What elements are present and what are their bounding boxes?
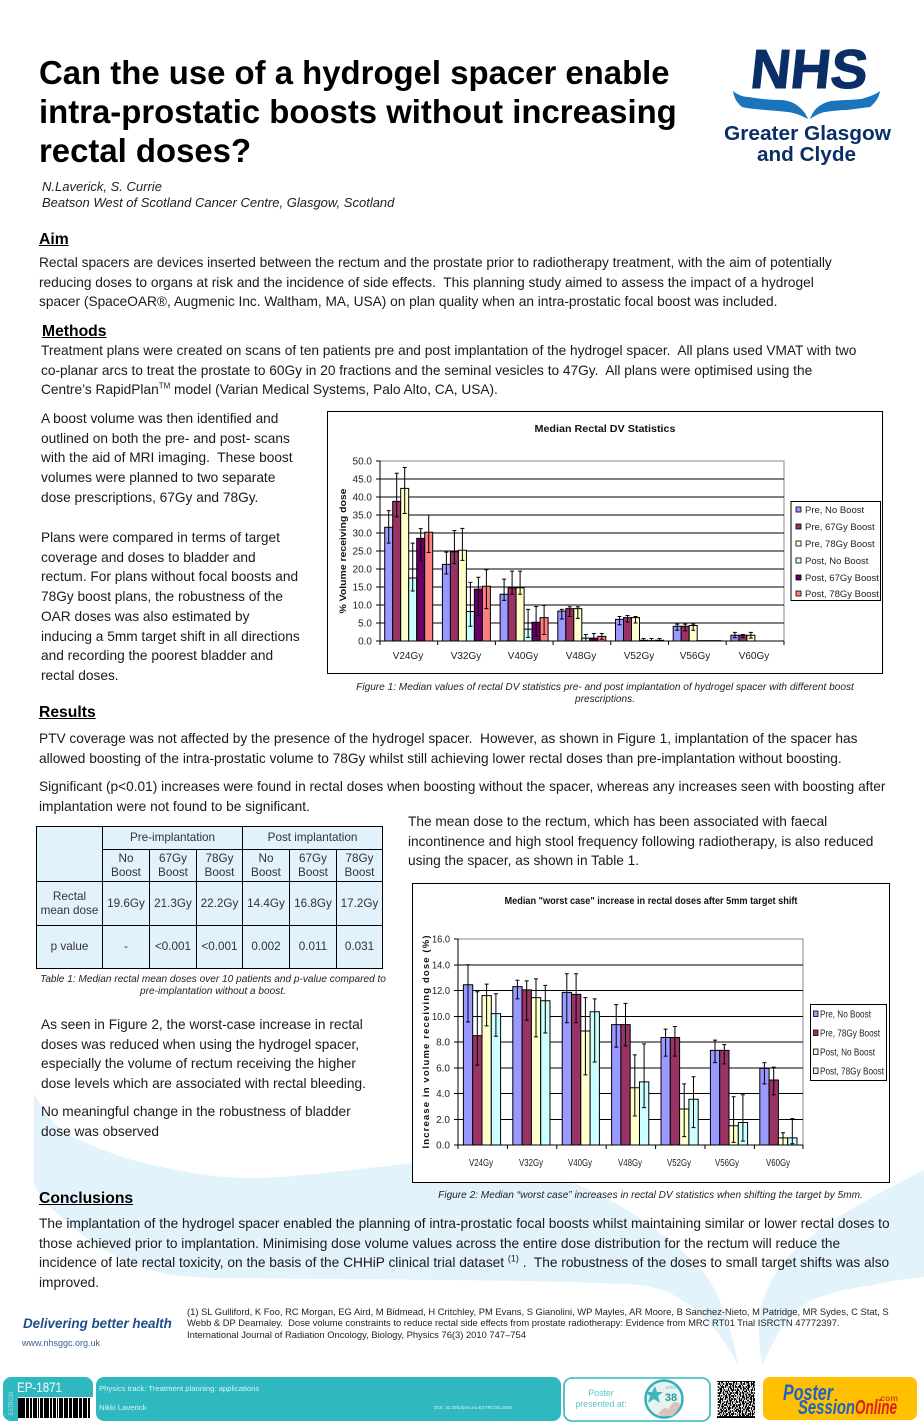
table 1: 17.2Gy (341, 896, 378, 910)
chart: figure 1: 5.0 (358, 618, 372, 630)
chart: figure 1: Post, 78Gy Boost (805, 589, 879, 600)
text: mean dose: The mean dose to the rectum, which has been associated with faecal (408, 814, 827, 829)
text: aim (39, 255, 832, 309)
authors: Beatson West of Scotland Cancer Centre, Glasgow, Scotland (42, 195, 394, 210)
text: bladder: dose was observed (41, 1124, 159, 1139)
footer: track and author bar: Physics track: Treatment planning: applications (99, 1384, 259, 1393)
chart: figure 2: 10.0 (432, 1012, 450, 1023)
chart: figure 2: Post, 78Gy Boost (820, 1066, 884, 1078)
table 1: 22.2Gy (201, 896, 238, 910)
heading: conclusions: Conclusions (39, 1190, 133, 1207)
chart: figure 2: Median "worst case" increase in rectal doses after 5mm target shift (504, 895, 798, 907)
text: mean dose: using the spacer, as shown in Table 1. (408, 853, 639, 868)
NHS logo (724, 38, 891, 166)
footer: track and author bar: Nikki Laverick (99, 1403, 146, 1412)
text: boost volume: dose prescriptions, 67Gy and 78Gy. (41, 490, 258, 505)
chart: figure 2: Increase in volume receiving dose (%) (421, 935, 432, 1149)
chart: figure 1: V56Gy (680, 651, 710, 662)
caption: figure 1: prescriptions. (575, 694, 635, 705)
text: boost volume: with the aid of MRI imaging. These boost (41, 450, 293, 465)
references: International Journal of Radiation Oncology, Biology, Physics 76(3) 2010 747–754 (187, 1329, 526, 1340)
text: conclusions: improved. (39, 1275, 99, 1290)
text: plan comparison: rectum. For plans without focal boosts and (41, 569, 298, 584)
table 1: Boost (345, 866, 374, 878)
text: worst case: especially the volume of rectum receiving the higher (41, 1056, 356, 1071)
table 1: Boost (298, 866, 328, 878)
table 1: <0.001 (155, 940, 191, 953)
caption: table 1: Table 1: Median rectal mean doses over 10 patients and p-value compared to (40, 974, 386, 985)
heading: aim: Aim (39, 231, 69, 248)
caption: table 1: pre-implantation without a boost. (140, 986, 286, 997)
text: plan comparison (41, 530, 300, 683)
text: plan comparison: 78Gy boost plans, the robustness of the (41, 589, 283, 604)
chart: figure 1: Pre, No Boost (805, 505, 864, 516)
footer: PosterSessionOnline logo: Online (855, 1397, 897, 1419)
text: boost volume: volumes were planned to two separate (41, 470, 275, 485)
heading: methods: Methods (42, 323, 106, 340)
table 1: 67Gy (159, 852, 187, 864)
chart: figure 2: Post, No Boost (820, 1048, 875, 1058)
chart: figure 1: V24Gy (393, 651, 423, 662)
chart: figure 1: Median Rectal DV Statistics (534, 424, 676, 435)
chart: figure 1: 50.0 (353, 456, 372, 468)
chart: figure 1: V52Gy (624, 651, 654, 662)
table 1: Rectal (53, 890, 86, 902)
chart: figure 1: V32Gy (451, 651, 481, 662)
chart: figure 2: V48Gy (618, 1158, 642, 1169)
text: worst case (41, 1017, 366, 1091)
text: boost volume: outlined on both the pre- and post- scans (41, 431, 290, 446)
text: conclusions: incidence of late rectal toxicity, on the basis of the CHHiP clinical trial dataset (1) . The robustness of the doses to small target shifts was also (39, 1254, 889, 1270)
text: boost volume (41, 411, 293, 505)
chart: figure 2: V60Gy (766, 1158, 790, 1169)
table 1: Boost (111, 866, 141, 878)
table 1: No (119, 852, 133, 864)
table 1 (36, 826, 383, 969)
table 1: Boost (251, 866, 281, 878)
chart: figure 1: V40Gy (508, 651, 538, 662)
title (39, 54, 677, 169)
chart: figure 1: 25.0 (353, 546, 372, 558)
text: boost volume: A boost volume was then identified and (41, 411, 278, 426)
text: methods: Centre’s RapidPlanTM model (Varian Medical Systems, Palo Alto, CA, USA). (41, 382, 498, 397)
chart: figure 2: 16.0 (432, 934, 450, 946)
title: intra-prostatic boosts without increasing (39, 93, 677, 130)
table 1: p value (51, 940, 88, 953)
title: Can the use of a hydrogel spacer enable (39, 54, 670, 91)
text: aim: Rectal spacers are devices inserted between the rectum and the prostate prior to radiotherapy treatment, with the aim of potentially (39, 255, 832, 270)
footer: track and author bar (96, 1377, 561, 1421)
chart: figure 2: 12.0 (432, 986, 450, 997)
table 1: Boost (205, 866, 234, 878)
text: significance: Significant (p<0.01) increases were found in rectal doses when boosting without the spacer, whereas any increases seen with boosting after (39, 779, 885, 794)
table 1: - (124, 940, 128, 953)
table 1: No (259, 852, 273, 864)
chart: figure 2: V24Gy (469, 1158, 493, 1169)
table 1: Post implantation (268, 831, 357, 844)
caption: figure 2: Figure 2: Median “worst case” increases in rectal DV statistics when shifting the target by 5mm. (438, 1190, 863, 1201)
chart: figure 1: Post, No Boost (805, 556, 869, 567)
caption: table 1 (40, 974, 386, 997)
text: worst case: As seen in Figure 2, the worst-case increase in rectal (41, 1017, 363, 1032)
table 1: Boost (158, 866, 188, 878)
NHS logo: and Clyde (757, 144, 856, 166)
text: methods (41, 343, 856, 397)
footer: poster presented at: presented at: (575, 1399, 627, 1409)
authors: N.Laverick, S. Currie (42, 179, 162, 194)
references: (1) SL Gulliford, K Foo, RC Morgan, EG Aird, M Bidmead, H Critchley, PM Evans, S Gianolini, WP Mayles, AR Moore, B Sanchez-Nieto, M Patridge, MR Sydes, C Stat, S (187, 1306, 889, 1317)
table 1: 19.6Gy (107, 896, 145, 910)
chart: figure 2: Pre, 78Gy Boost (820, 1028, 880, 1040)
chart: figure 2: V40Gy (568, 1158, 592, 1169)
chart: figure 2: V56Gy (715, 1158, 739, 1169)
text: results: PTV coverage was not affected by the presence of the hydrogel spacer. However, as shown in Figure 1, implantation of the spacer has (39, 731, 857, 746)
text: plan comparison: rectal doses. (41, 668, 119, 683)
text: aim: reducing doses to organs at risk and the incidence of side effects. This planning study aimed to assess the impact of a hydrogel (39, 275, 814, 290)
text: significance: implantation were not found to be significant. (39, 799, 310, 814)
text: methods: co-planar arcs to treat the prostate to 60Gy in 20 fractions and the seminal vesicles to 47Gy. All plans were optimised using the (41, 363, 812, 378)
text: mean dose: incontinence and high stool frequency following radiotherapy, is also reduced (408, 834, 873, 849)
table 1: mean dose (41, 904, 98, 916)
chart: figure 1: 20.0 (353, 564, 372, 576)
text: plan comparison: inducing a 5mm target shift in all directions (41, 629, 300, 644)
footer: PosterSessionOnline logo: Poster (783, 1380, 834, 1405)
text: plan comparison: Plans were compared in terms of target (41, 530, 280, 545)
chart: figure 2: V52Gy (667, 1158, 691, 1169)
table 1: 0.002 (251, 940, 281, 953)
chart: figure 2: 0.0 (436, 1140, 450, 1152)
footer: poster id with barcode: EP-1871 (17, 1380, 62, 1395)
slogan: Delivering better health (23, 1316, 172, 1331)
table 1: 16.8Gy (294, 896, 332, 910)
text: mean dose (408, 814, 873, 868)
references (187, 1306, 889, 1340)
text: results (39, 731, 857, 766)
chart: figure 2: 8.0 (436, 1038, 450, 1048)
references: Webb & DP Dearnaley. Dose volume constraints to reduce rectal side effects from prostate radiotherapy: Evidence from MRC RT01 Trial ISRCTN 47772397. (187, 1317, 840, 1328)
text: worst case: dose levels which are associated with rectal bleeding. (41, 1076, 366, 1091)
chart: figure 1: 10.0 (353, 600, 372, 612)
chart: figure 1: % Volume receiving dose (338, 488, 349, 614)
slogan (22, 1316, 172, 1348)
chart: figure 1: 35.0 (353, 510, 372, 522)
text: conclusions: The implantation of the hydrogel spacer enabled the planning of intra-prostatic focal boosts whilst maintaining similar or lower rectal doses to (39, 1216, 890, 1231)
chart: figure 1: Pre, 78Gy Boost (805, 539, 875, 550)
table 1: 14.4Gy (247, 896, 285, 910)
text: plan comparison: OAR doses was also estimated by (41, 609, 249, 624)
table 1: 21.3Gy (154, 896, 192, 910)
text: plan comparison: coverage and doses to bladder and (41, 550, 256, 565)
chart: figure 2: 4.0 (436, 1089, 450, 1100)
title: rectal doses? (39, 132, 251, 169)
chart: figure 1: 15.0 (353, 582, 372, 594)
table 1: <0.001 (201, 940, 238, 953)
chart: figure 1: 30.0 (353, 528, 372, 540)
chart: figure 2: 14.0 (432, 960, 450, 972)
chart: figure 2: V32Gy (519, 1158, 543, 1169)
footer: poster presented at: Poster (588, 1388, 614, 1398)
chart: figure 1: Post, 67Gy Boost (805, 573, 879, 584)
authors (42, 179, 395, 210)
text: results: allowed boosting of the intra-prostatic volume to 78Gy whilst still achieving lower rectal doses than pre-implantation without boosting. (39, 751, 842, 766)
heading: results: Results (39, 704, 96, 721)
text: bladder: No meaningful change in the robustness of bladder (41, 1104, 351, 1119)
chart: figure 1: V48Gy (566, 651, 596, 662)
footer: poster presented at: 38 (665, 1392, 677, 1404)
NHS logo: Greater Glasgow (724, 123, 891, 145)
text: conclusions: those achieved prior to implantation. Minimising dose volume values across the entire dose distribution for the rectum will reduce the (39, 1236, 840, 1251)
text: worst case: doses was reduced when using the hydrogel spacer, (41, 1037, 359, 1052)
chart: figure 1 (327, 411, 883, 674)
footer: PosterSessionOnline logo: Session (798, 1397, 855, 1419)
text: plan comparison: and recording the poorest bladder and (41, 648, 273, 663)
table 1: 67Gy (299, 852, 327, 864)
text: bladder (41, 1104, 351, 1139)
chart: figure 2: 2.0 (436, 1115, 450, 1126)
NHS logo: NHS (748, 38, 871, 100)
text: significance (39, 779, 886, 814)
table 1: 0.011 (299, 940, 327, 953)
text: methods: Treatment plans were created on scans of ten patients pre and post implantation of the hydrogel spacer. All plans used VMAT with two (41, 343, 856, 358)
footer: poster id with barcode: ESTRO38 (8, 1392, 15, 1415)
chart: figure 1: V60Gy (739, 651, 769, 662)
table 1: 78Gy (206, 852, 233, 864)
chart: figure 1: 40.0 (353, 492, 372, 504)
caption: figure 1 (356, 682, 854, 705)
chart: figure 1: Pre, 67Gy Boost (805, 522, 875, 533)
chart: figure 2: 6.0 (436, 1064, 450, 1074)
caption: figure 1: Figure 1: Median values of rectal DV statistics pre- and post implantation of hydrogel spacer with different boost (356, 682, 854, 693)
chart: figure 1: 0.0 (358, 636, 372, 648)
text: aim: spacer (SpaceOAR®, Augmenic Inc. Waltham, MA, USA) on plan quality when an intra-prostatic focal boost was included. (39, 294, 777, 309)
chart: figure 1: 45.0 (353, 474, 372, 486)
footer: PosterSessionOnline logo: .com (878, 1394, 898, 1403)
footer: poster presented at: estro (665, 1385, 677, 1391)
chart: figure 2: Pre, No Boost (820, 1010, 871, 1020)
table 1: 0.031 (345, 940, 374, 953)
table 1: 78Gy (346, 852, 373, 864)
slogan: www.nhsggc.org.uk (22, 1338, 100, 1348)
text: conclusions (39, 1216, 890, 1290)
table 1: Pre-implantation (130, 831, 215, 844)
footer: track and author bar: DOI: 10.3252/pso.eu.ESTRO38.2019 (434, 1405, 512, 1410)
